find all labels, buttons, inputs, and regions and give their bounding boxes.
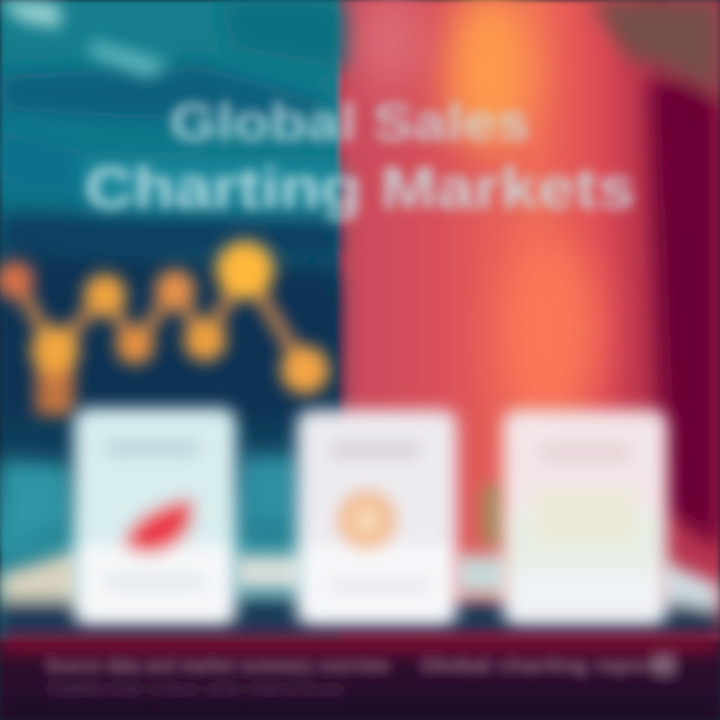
footer text: Global charting report [420, 655, 660, 677]
card 1 heading [105, 440, 200, 456]
footer band [0, 640, 720, 720]
line chart: orange trend [0, 241, 329, 415]
title: Global Sales [170, 94, 530, 152]
footer text: Source data and market summary overview [45, 655, 390, 677]
card 1 [74, 408, 236, 626]
card 2 orange ring chart [345, 498, 389, 542]
card 2 heading [330, 442, 420, 458]
background: red right side [340, 0, 720, 640]
title [85, 94, 635, 221]
card 1 red shape [124, 498, 193, 553]
base strip: beige and navy [0, 485, 720, 638]
card 3 pale chart [535, 490, 635, 540]
card 1 footer [105, 575, 205, 589]
footer text [45, 655, 660, 698]
background: teal left side [0, 0, 345, 640]
card 3 [503, 410, 667, 626]
title: Charting Markets [85, 156, 635, 221]
footer icon [654, 654, 676, 676]
card 2 [297, 410, 457, 626]
card 3 heading [540, 445, 630, 461]
wave highlights [0, 0, 170, 78]
background: teal waves [0, 0, 345, 550]
footer text: Additional notes and references [45, 681, 345, 698]
card 2 footer [330, 578, 430, 592]
background: dark maroon curtain [590, 0, 720, 550]
